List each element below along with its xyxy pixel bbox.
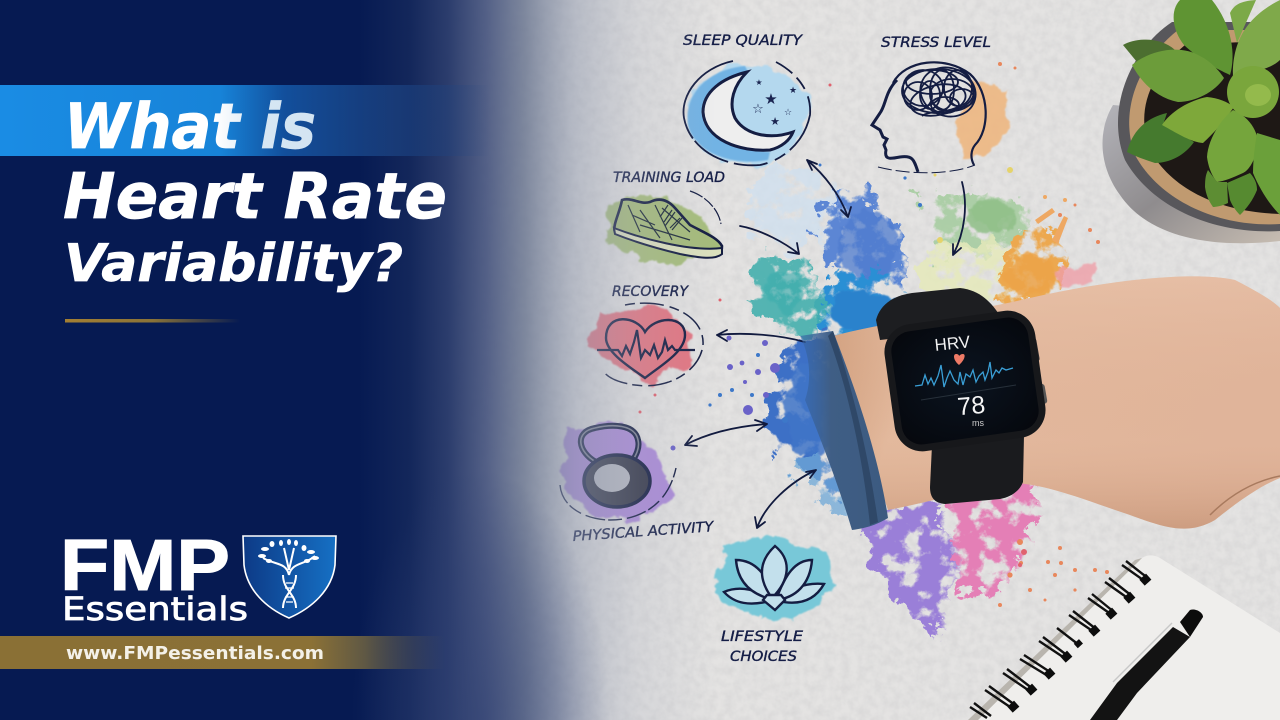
label: lifestyle choices: CHOICES: [730, 649, 797, 665]
splash: pink right: [1055, 262, 1096, 292]
stars: [752, 78, 797, 128]
leaf: low left: [1205, 170, 1228, 207]
splash: purple lower: [860, 500, 960, 640]
value 78: 78: [956, 391, 986, 421]
swoosh dashes: [690, 191, 721, 224]
watercolor splashes behind the watch: [638, 62, 1109, 640]
screen: [889, 315, 1041, 447]
pot rim: [1118, 22, 1280, 231]
heart outline: [606, 319, 685, 378]
rosette shade: [1245, 84, 1271, 106]
pot body: [1103, 105, 1280, 243]
stars: ★: [764, 90, 778, 108]
ecg line: [597, 330, 695, 358]
leaf: low right: [1227, 173, 1257, 215]
lower-left shadow on the paper: [350, 470, 610, 720]
spiral rings: [970, 561, 1149, 718]
arrow: training: [740, 226, 799, 254]
splash: blue by the sleeve: [765, 335, 860, 510]
dashed arc: [560, 468, 676, 520]
divider: [921, 385, 1016, 400]
stars: ★: [789, 86, 797, 96]
icon: recovery heart: [590, 303, 703, 386]
splash: cyan lower core: [830, 290, 894, 334]
shoe sole: [614, 228, 722, 258]
spiral notebook with pen: [968, 555, 1280, 720]
splash: teal core: [765, 272, 805, 312]
binding strip: [968, 558, 1142, 720]
label: lifestyle choices: [721, 629, 803, 665]
case: [881, 307, 1049, 455]
shoe detail lines: [628, 205, 690, 240]
teal wash: [715, 535, 835, 620]
soil: [1144, 40, 1280, 214]
kettlebell handle: [581, 426, 639, 462]
label: sleep quality: SLEEP QUALITY: [683, 33, 804, 49]
icon: lifestyle lotus: [715, 535, 835, 620]
page: [978, 555, 1280, 720]
website url: www.FMPessentials.com: [66, 643, 324, 664]
arrow: recovery: [717, 330, 805, 342]
red wash: [590, 308, 695, 382]
stars: ★: [755, 78, 763, 87]
logo shield: [243, 536, 336, 618]
splash: green: [920, 190, 1030, 255]
arrows linking factors to the wrist: [685, 160, 965, 528]
splash: green core: [964, 200, 1016, 236]
logo: [60, 526, 336, 628]
splash: blue core: [838, 210, 898, 280]
logo wordmark: Essentials: Essentials: [62, 590, 248, 628]
blue title ribbon: [0, 85, 490, 156]
splash: deep blue lower: [815, 270, 920, 345]
crown buttons: [1028, 337, 1048, 405]
strap top: [876, 288, 1000, 340]
unit ms: ms: [972, 418, 984, 428]
title: Variability?: [64, 234, 403, 294]
arrow: sleep: [807, 160, 851, 217]
lotus petals: [724, 546, 824, 610]
label: stress level: STRESS LEVEL: [881, 35, 991, 51]
smartwatch: [876, 288, 1049, 504]
label: training load: TRAINING LOAD: [613, 170, 725, 186]
heart: [954, 354, 965, 365]
leaf: mid: [1162, 97, 1234, 143]
splash: orange core: [1004, 255, 1056, 295]
icon: stress level head: [872, 60, 1012, 173]
icon: physical activity kettlebell: [560, 422, 676, 520]
leaf: top: [1174, 0, 1233, 75]
website band: [0, 636, 445, 669]
splash: blue core by sleeve: [784, 362, 840, 458]
title: What is: [64, 90, 316, 163]
pen: [1090, 609, 1203, 720]
dashed neck ring: [878, 165, 975, 173]
splash: orange: [990, 225, 1070, 305]
arrow: stress: [953, 182, 965, 255]
hrv waveform: [915, 362, 1013, 387]
denim sleeve: [800, 331, 888, 530]
moon blue band: [688, 66, 770, 162]
orange wash: [955, 80, 1012, 160]
leaf: top middle: [1230, 0, 1256, 43]
ring ends: [1007, 574, 1151, 713]
title: [63, 90, 447, 294]
highlight: [594, 464, 630, 492]
purple wash: [563, 422, 672, 520]
label: physical activity: PHYSICAL ACTIVITY: [572, 519, 715, 545]
icon: sleep quality moon: [683, 61, 810, 165]
strap bottom: [930, 435, 1024, 504]
back of head: [893, 62, 986, 165]
scribble brain: [902, 60, 983, 124]
shoe body: [614, 199, 722, 257]
leaf: back left dark: [1123, 40, 1175, 62]
splash: pale blue wash: [747, 166, 843, 250]
splash: pale yellow green: [920, 242, 1030, 302]
label: recovery: RECOVERY: [612, 284, 689, 300]
inner terracotta: [1129, 30, 1280, 224]
moon dashed outer ring: [683, 61, 810, 165]
leaf: left big: [1132, 50, 1224, 102]
arrow: physical activity: [685, 420, 767, 446]
leaf: dark lower: [1127, 113, 1194, 163]
stars: ★: [770, 115, 780, 128]
screen text: HRV: HRV: [934, 332, 972, 355]
potted succulent: [1103, 0, 1280, 243]
splash: pink lower: [945, 480, 1040, 600]
splash: paint dots: [638, 62, 1109, 607]
leaf: right: [1253, 133, 1280, 215]
stars: ☆: [752, 102, 764, 117]
arrow: lifestyle: [755, 470, 816, 528]
head profile outline: [872, 80, 918, 172]
title: Heart Rate: [63, 160, 447, 233]
leaf: bottom centre: [1207, 110, 1258, 182]
hand and forearm: [830, 276, 1280, 529]
gold accent line: [65, 319, 240, 322]
label: lifestyle choices: LIFESTYLE: [721, 629, 803, 645]
logo wordmark: FMP: FMP: [60, 526, 230, 606]
rosette centre: [1227, 66, 1279, 118]
dashed ring: [604, 303, 703, 386]
kettlebell body: [584, 455, 650, 507]
splash: teal: [750, 255, 830, 335]
leaves: [1123, 0, 1280, 215]
moon white crescent: [703, 72, 793, 150]
splash: sky blue by the sleeve: [785, 455, 875, 520]
stars: ☆: [784, 108, 792, 118]
leaf: top right: [1233, 0, 1280, 78]
green wash: [604, 192, 715, 265]
icon: training load shoe: [604, 191, 722, 265]
splash: blue: [822, 195, 905, 300]
moon wash: [688, 65, 809, 164]
